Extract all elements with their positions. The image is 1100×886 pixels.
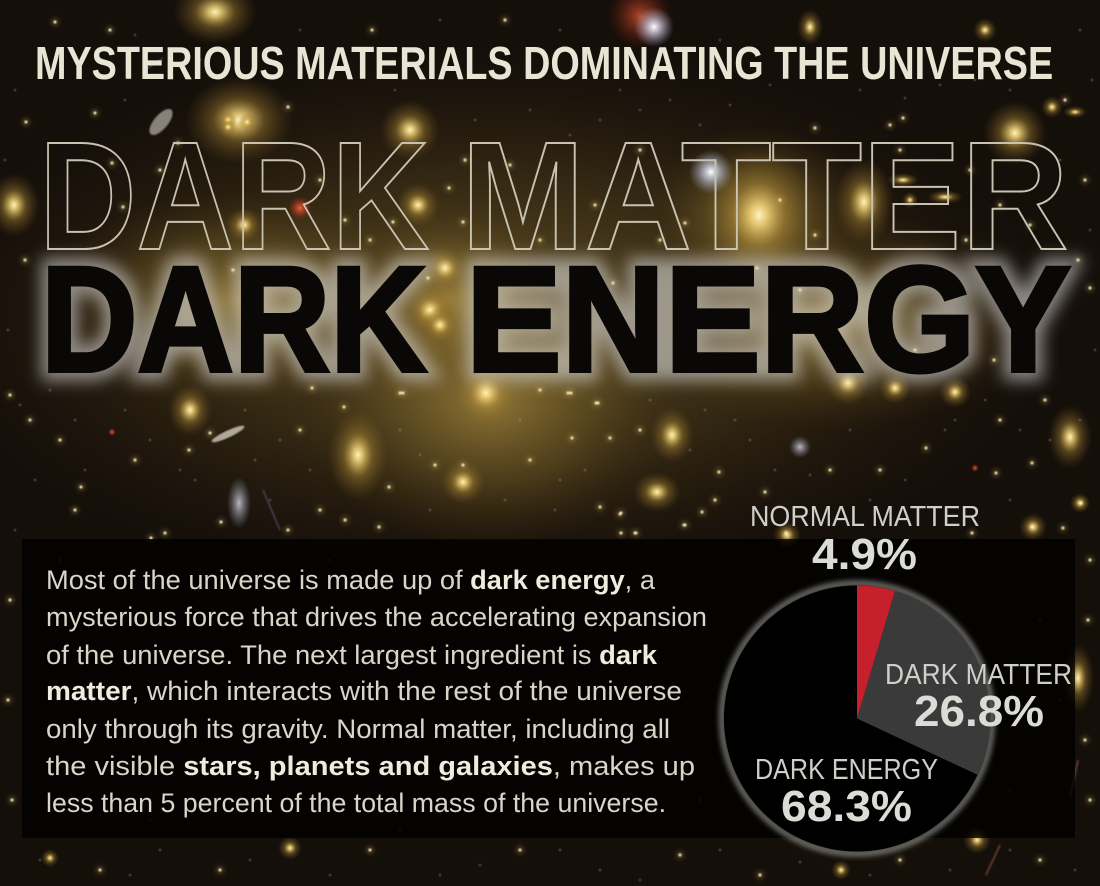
heading: dark matter outlined: MATTER [461,111,1068,283]
text block: description: of the universe. The next largest ingredient is dark [46,640,657,670]
label: dark energy: DARK ENERGY [755,754,938,786]
pie chart [722,584,992,854]
text block: description: only through its gravity. Normal matter, including all [46,714,670,744]
label: dark energy: 68.3% [781,782,912,831]
text block: description: matter, which interacts with the rest of the universe [46,676,682,706]
heading: dark energy solid with glow [41,236,1071,404]
label: normal matter [750,501,980,579]
text block: description: mysterious force that drives the accelerating expansion [46,602,707,632]
title: mysterious materials: MYSTERIOUS MATERIALS DOMINATING THE UNIVERSE [35,37,1053,89]
heading: dark energy solid with glow: ENERGY [466,236,1071,404]
heading: dark matter outlined [39,110,1068,283]
panel: explanation and pie chart [22,539,1075,838]
label: normal matter: NORMAL MATTER [750,501,980,533]
text block: description: the visible stars, planets and galaxies , makes up [46,751,695,781]
label: dark matter: 26.8% [914,687,1044,736]
text block: description [46,565,707,818]
text block: description: less than 5 percent of the total mass of the universe. [46,788,666,818]
pie slice: dark matter [857,591,991,775]
heading: dark matter outlined: DARK [39,110,429,282]
heading: dark energy solid with glow: DARK [41,236,427,404]
pie slice: normal matter [857,585,895,718]
text block: description: Most of the universe is made up of dark energy, a [46,565,655,595]
label: normal matter: 4.9% [812,530,917,579]
label: dark energy [755,754,938,831]
label: dark matter: DARK MATTER [885,659,1072,691]
label: dark matter [885,659,1072,736]
heading: dark energy solid with glow: ENERGY [466,236,1071,404]
heading: dark energy solid with glow: DARK [41,236,427,404]
